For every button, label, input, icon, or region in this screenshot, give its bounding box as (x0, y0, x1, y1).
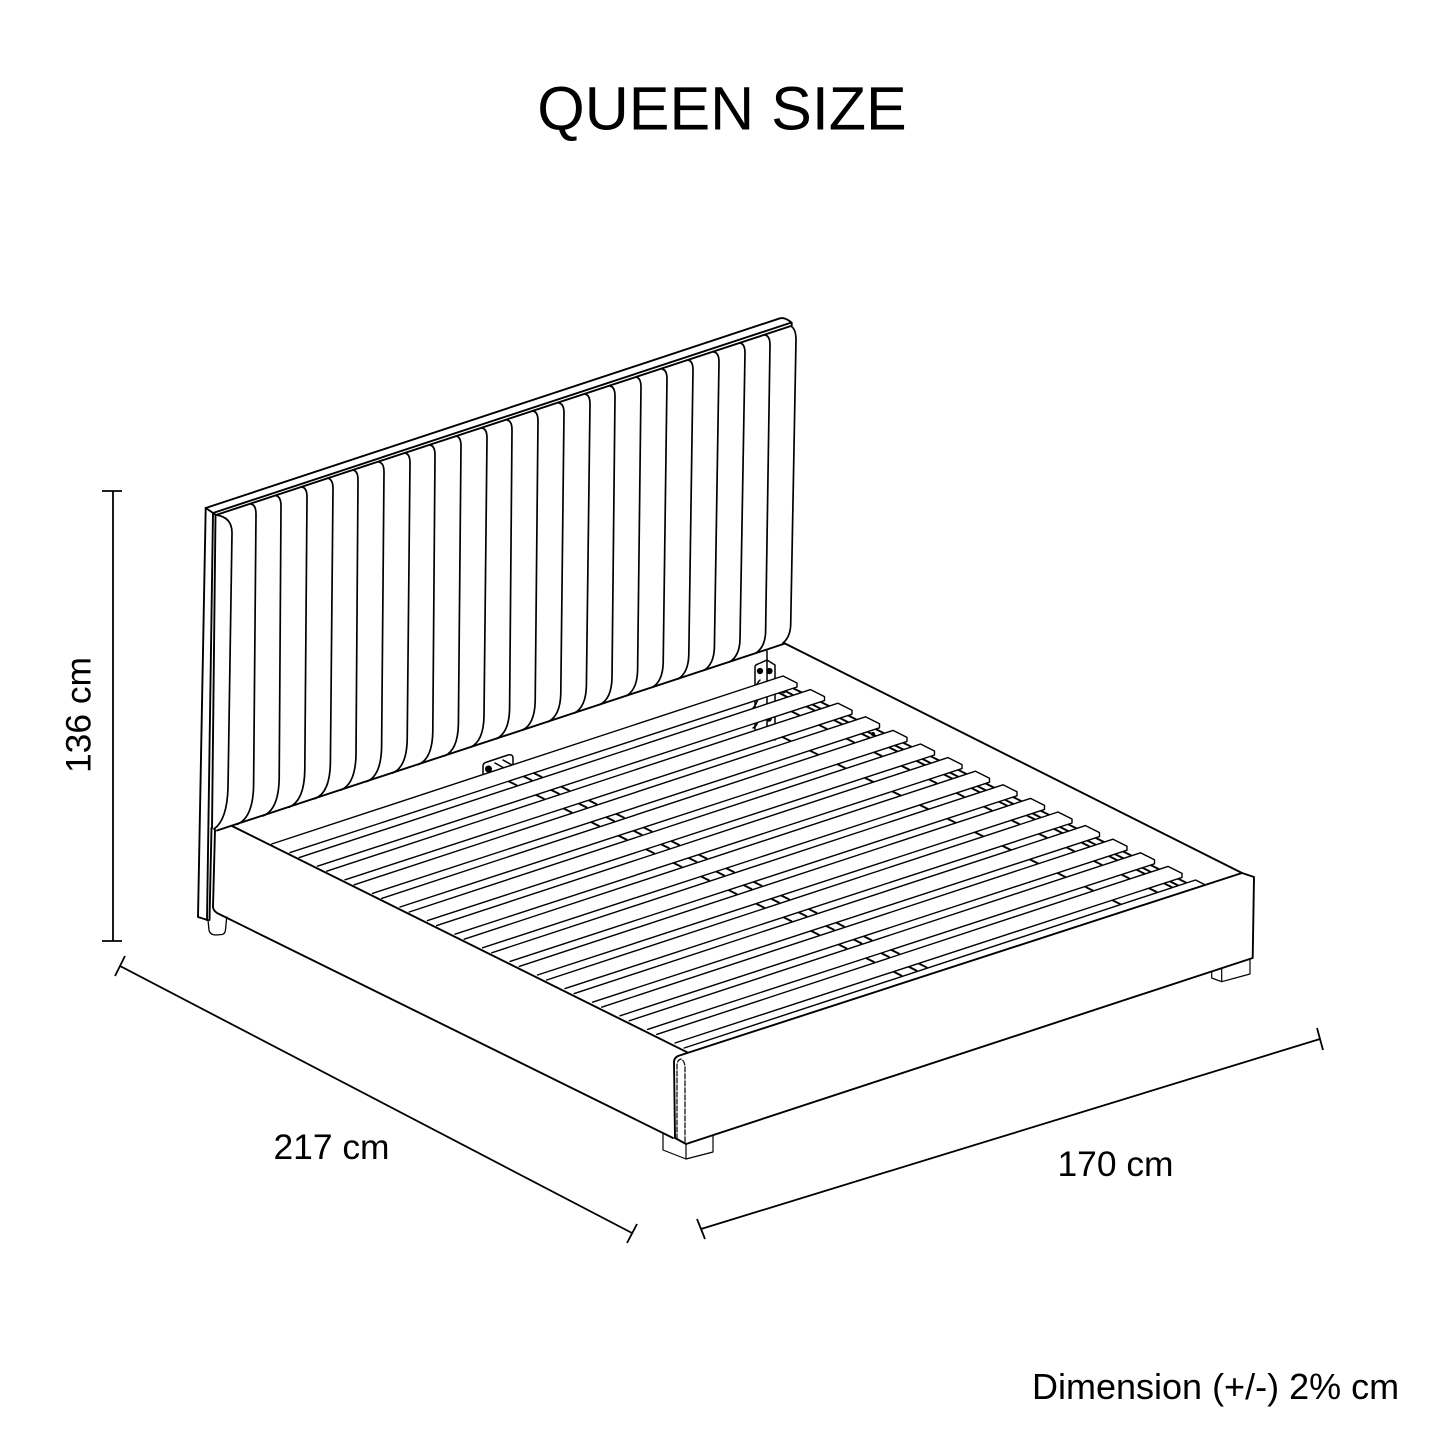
dimension line: height (102, 491, 122, 941)
length label: 217 cm (273, 1127, 390, 1167)
slat gap marks (508, 688, 1186, 976)
height label: 136 cm (58, 657, 98, 773)
right headboard bracket (753, 651, 775, 740)
tolerance note: Dimension (+/-) 2% cm (1032, 1366, 1399, 1407)
foot: back left (208, 917, 227, 935)
width label: 170 cm (1057, 1144, 1174, 1184)
headboard vertical channels (214, 327, 796, 829)
foot: front right (1212, 959, 1250, 982)
title: QUEEN SIZE (537, 74, 907, 142)
bed illustration (198, 318, 1254, 1159)
front rail (674, 873, 1254, 1144)
bed slats (272, 676, 1210, 1057)
back right rail edge (785, 644, 1242, 873)
corner stitching (677, 1059, 685, 1143)
side rail (213, 826, 688, 1138)
dimension line: width (697, 1028, 1323, 1239)
foot: front left (663, 1134, 713, 1159)
left headboard bracket (483, 755, 513, 774)
headboard frame (198, 318, 792, 920)
dimension line: length (115, 956, 637, 1243)
